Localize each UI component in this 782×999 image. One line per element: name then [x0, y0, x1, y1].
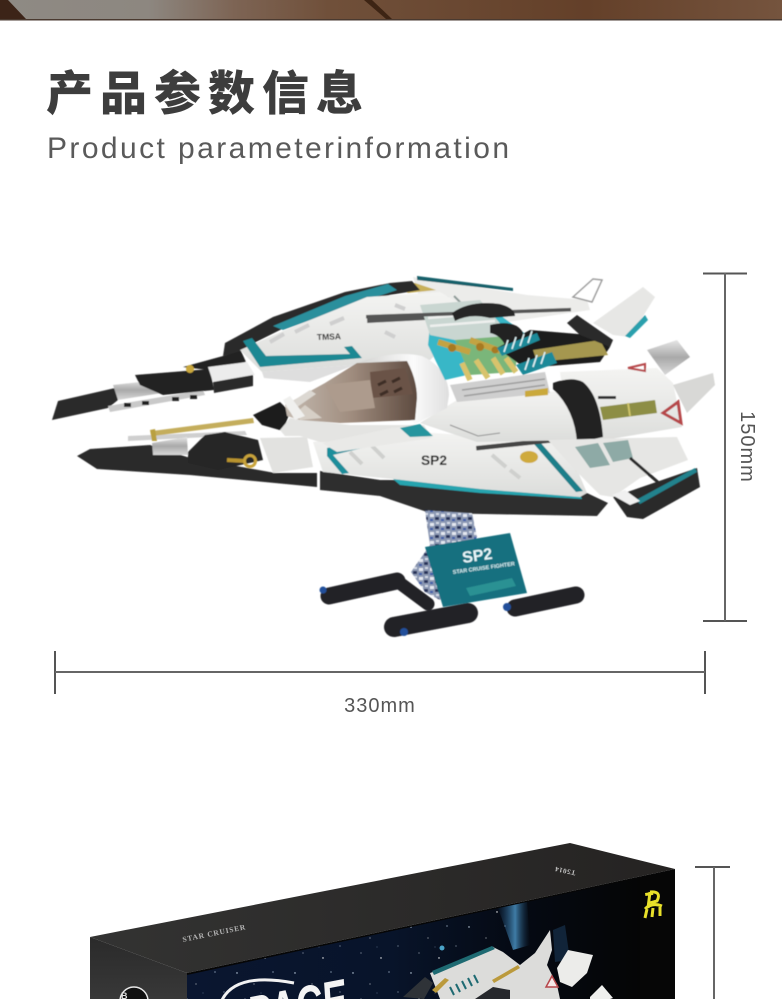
- upper prong: [52, 351, 255, 420]
- display stand: [320, 510, 576, 636]
- rear fins: [567, 287, 715, 413]
- space artwork: [187, 895, 569, 999]
- lower wing black hull: [320, 471, 608, 516]
- black band: [553, 379, 603, 443]
- starfighter model: [52, 276, 715, 519]
- box top face: T5014: [554, 865, 576, 877]
- height label: 150mm: [736, 411, 758, 483]
- product box: [90, 843, 675, 999]
- rear engine pod: [553, 364, 682, 443]
- box art starfighter: [403, 930, 613, 999]
- cockpit dome: [283, 354, 449, 424]
- stand column: [411, 510, 477, 600]
- stand plaque: SP2: [461, 546, 494, 567]
- engine core: glass, gold and teal: [366, 300, 571, 402]
- TMSA marking: TMSA: [317, 331, 341, 342]
- nose cone and gold rod: [150, 402, 420, 442]
- rear black block: [613, 468, 700, 519]
- lower wing rear section: [548, 437, 700, 519]
- box front face: [187, 860, 675, 999]
- SP2 marking: SP2: [421, 452, 447, 468]
- dark arches and rack: [452, 303, 610, 375]
- top photo strip: [0, 0, 782, 20]
- title: Chinese heading: 产品参数信息: [46, 67, 370, 120]
- cockpit canopy: [285, 361, 417, 423]
- foot end caps: [320, 586, 511, 636]
- upper wing white panel: [240, 292, 480, 382]
- subtitle: English heading: Product parameterinformation: [47, 132, 509, 165]
- box side face: [90, 937, 187, 999]
- box top face: STAR CRUISER: [182, 922, 247, 944]
- logo arc: [222, 980, 294, 999]
- lower prong: [77, 431, 317, 487]
- stand plaque: [425, 533, 527, 607]
- rear upper wing tail: [395, 276, 602, 322]
- box top face: [90, 843, 675, 973]
- lower wing white panel: [313, 430, 591, 497]
- box height dimension line: [695, 866, 730, 999]
- width label: 330mm: [344, 695, 416, 717]
- upper wing dark hull: [223, 281, 420, 356]
- yellow brand logo: [645, 892, 662, 918]
- stand plaque: STAR CRUISE FIGHTER: [452, 561, 515, 576]
- stand feet: [329, 581, 576, 627]
- mid hull: [322, 390, 578, 452]
- red triangle marking: [663, 402, 681, 423]
